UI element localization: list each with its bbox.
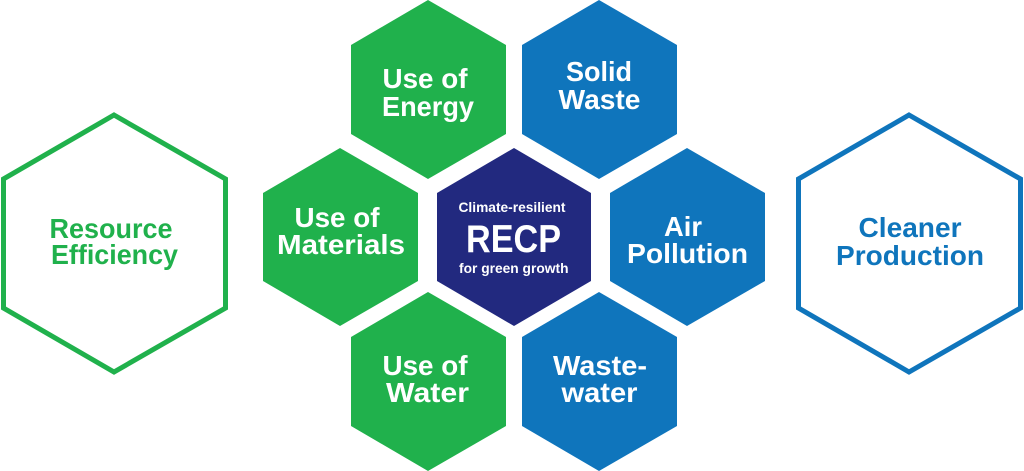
panel: Cleaner Production outline hexagon: Cleaner bbox=[858, 212, 962, 243]
panel: Air Pollution hexagon: Air bbox=[664, 211, 702, 242]
panel: central RECP hexagon: RECP bbox=[466, 218, 561, 261]
panel: Solid Waste hexagon bbox=[522, 0, 677, 179]
panel: Cleaner Production outline hexagon bbox=[798, 115, 1020, 372]
panel: Cleaner Production outline hexagon: Production bbox=[836, 240, 984, 271]
panel: Use of Materials hexagon: Use of bbox=[294, 202, 380, 233]
panel: Use of Energy hexagon: Energy bbox=[382, 91, 474, 122]
panel: Use of Energy hexagon bbox=[351, 0, 506, 179]
panel: central RECP hexagon: for green growth bbox=[459, 260, 568, 276]
panel: central RECP hexagon bbox=[437, 148, 591, 326]
panel: Resource Efficiency outline hexagon bbox=[4, 115, 226, 372]
panel: Wastewater hexagon: water bbox=[560, 377, 638, 408]
panel: Solid Waste hexagon: Solid bbox=[566, 56, 632, 87]
panel: central RECP hexagon: Climate-resilient bbox=[458, 199, 566, 215]
panel: Wastewater hexagon: Waste- bbox=[553, 350, 647, 381]
panel: Resource Efficiency outline hexagon: Efficiency bbox=[51, 239, 178, 270]
panel: Use of Energy hexagon: Use of bbox=[382, 63, 468, 94]
panel: Use of Materials hexagon: Materials bbox=[277, 229, 405, 260]
panel: Use of Materials hexagon bbox=[263, 148, 418, 326]
panel: Air Pollution hexagon bbox=[610, 148, 765, 326]
panel: Wastewater hexagon bbox=[522, 292, 677, 471]
panel: Use of Water hexagon: Water bbox=[386, 377, 469, 408]
panel: Use of Water hexagon bbox=[351, 292, 506, 471]
panel: Solid Waste hexagon: Waste bbox=[558, 84, 640, 115]
panel: Resource Efficiency outline hexagon: Resource bbox=[50, 213, 172, 244]
panel: Air Pollution hexagon: Pollution bbox=[627, 238, 748, 269]
panel: Use of Water hexagon: Use of bbox=[382, 350, 468, 381]
